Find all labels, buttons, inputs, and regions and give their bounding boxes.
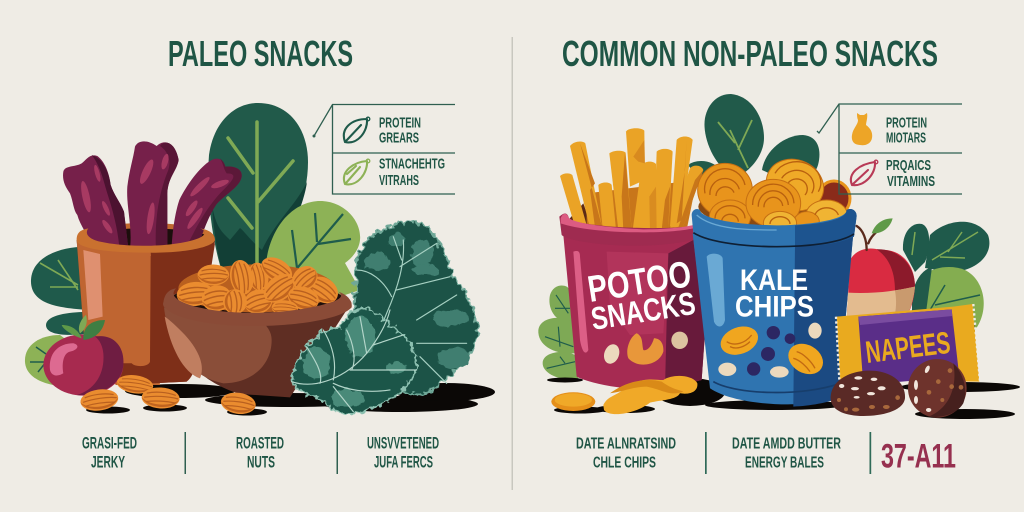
back kale leaf: [353, 222, 477, 395]
cup label: kale chips: CHIPS: [735, 290, 814, 324]
label: grass-fed jerky: GRASI-FED: [82, 434, 137, 452]
bowl of roasted nuts: [163, 252, 352, 397]
text: protein miotars: MIOTARS: [886, 130, 926, 146]
almonds in bowl: [176, 252, 343, 317]
clay cup back: [78, 223, 214, 254]
ground shadows: [86, 383, 495, 416]
label: unsweetened: JUFA FERCS: [374, 454, 433, 472]
label: unsweetened: [367, 434, 439, 472]
jerky strips: [63, 141, 242, 248]
panel: non-paleo snacks illustration: [538, 94, 1020, 419]
chip pile: [698, 150, 850, 235]
cup label: potoo snacks: [585, 253, 698, 337]
label: date chips: [576, 436, 676, 472]
loose almonds: [79, 373, 257, 416]
label: energy balls: [732, 436, 841, 472]
date energy balls: [831, 359, 967, 418]
cup label: kale chips: KALE: [740, 264, 808, 297]
front kale leaf: [292, 309, 417, 414]
text: protein miotars: [886, 114, 927, 146]
label: grass-fed jerky: [82, 434, 137, 472]
title: paleo snacks: PALEO SNACKS: [168, 33, 353, 74]
big dark leaf: [208, 103, 308, 272]
label: date chips: DATE ALNRATSIND: [576, 436, 676, 452]
purple snack bar: [836, 304, 980, 385]
label: date chips: CHLE CHIPS: [593, 454, 656, 472]
text: vitamins: [379, 156, 445, 189]
dark leaves behind chips: [688, 94, 819, 185]
kale leaves: [292, 222, 477, 414]
panel: paleo snacks illustration: [25, 103, 495, 416]
bowl body: [164, 307, 347, 397]
text: proaics vitamins: PRQAICS: [886, 157, 931, 174]
fries: [560, 128, 703, 230]
label: unsweetened: UNSVVETENED: [367, 434, 439, 452]
label: red code: 37-A11: [881, 438, 956, 476]
red potato snacks cup: [559, 213, 705, 390]
bar label: napees: NAPEES: [864, 325, 952, 370]
text: protein grears: PROTEIN: [379, 114, 421, 132]
info box: non-paleo nutrients: [817, 104, 962, 194]
apple with leaves: [43, 315, 123, 396]
cup label: kale chips: [735, 264, 814, 324]
icon: orange flask: [852, 113, 872, 145]
text: vitamins: VITRAHS: [379, 172, 419, 189]
cup label: potoo snacks: SNACKS: [588, 285, 698, 337]
label: roasted nuts: [236, 434, 284, 472]
icon: red leaf: [851, 160, 878, 185]
cup decorations: chips, berries and nuts: [717, 322, 829, 380]
left small leaves: [538, 285, 578, 380]
blue kale chips cup: [692, 209, 857, 407]
text: vitamins: STNACHEHTG: [379, 156, 445, 172]
text: proaics vitamins: VITAMINS: [887, 173, 935, 190]
text: protein miotars: PROTEIN: [886, 114, 927, 132]
label: grass-fed jerky: JERKY: [91, 454, 125, 472]
text: protein grears: GREARS: [379, 130, 419, 146]
cup decorations: [601, 332, 688, 366]
clay cup body: [77, 228, 215, 385]
label: energy balls: DATE AMDD BUTTER: [732, 436, 841, 452]
right leaves: [903, 222, 989, 335]
small leaves behind cup: [25, 247, 92, 386]
text: proaics vitamins: [886, 157, 935, 190]
light green leaf: [265, 201, 360, 300]
labels: paleo snacks: [82, 432, 439, 474]
red apple with stem: [847, 218, 915, 320]
potato chips on ground: [551, 376, 697, 414]
cup label: potoo snacks: POTOO: [585, 253, 694, 310]
icon: green leaf: [344, 159, 370, 184]
text: protein grears: [379, 114, 421, 146]
label: roasted nuts: NUTS: [247, 454, 275, 472]
label: roasted nuts: ROASTED: [236, 434, 284, 452]
info box: paleo nutrients: [312, 104, 455, 194]
label: energy balls: ENERGY BALES: [745, 454, 824, 472]
labels: non-paleo snacks: [576, 432, 956, 476]
ground shadows: [547, 378, 1020, 419]
icon: dark leaf: [344, 117, 370, 142]
